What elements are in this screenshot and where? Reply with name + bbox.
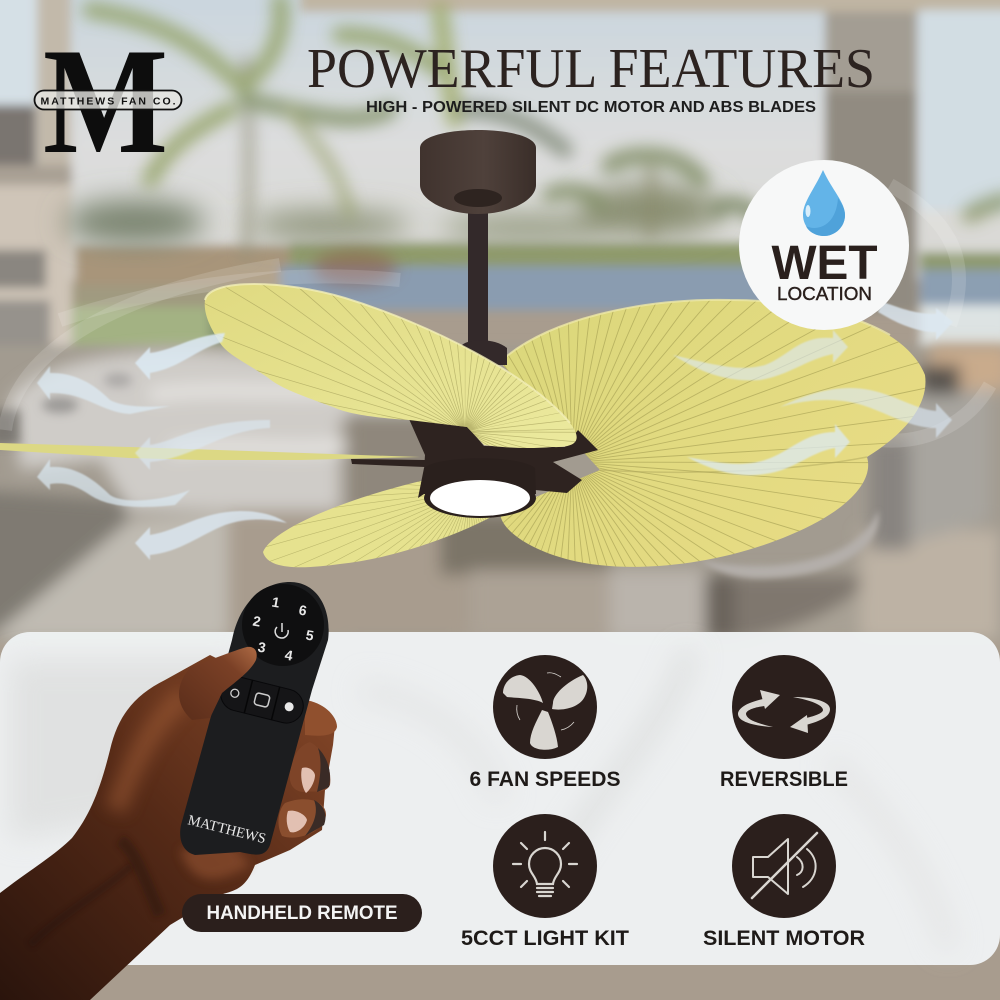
remote numbers: 2 [252,613,262,630]
remote numbers: 1 [271,594,281,611]
remote brand: MATTHEWS [186,812,268,847]
table top [700,510,879,578]
ceiling fan [0,130,940,652]
light globe [430,480,530,516]
finger: ring [278,799,326,838]
feature: 5cct light kit: 5CCT LIGHT KIT [461,927,629,950]
feature: 6 fan speeds [470,655,620,791]
downrod [468,195,488,345]
icon: rotation arrows [738,690,830,733]
icon: muted speaker [752,833,817,898]
finger: middle [290,742,330,792]
icon: water drop [803,170,845,236]
remote dial [242,584,324,666]
finger: index [305,700,337,736]
hand: arm and fingers behind remote [0,655,337,1000]
hand: thumb [179,647,257,720]
feature: silent motor: SILENT MOTOR [703,927,865,950]
motor housing and blade arms [351,419,598,518]
arrow: far right lower [780,388,952,438]
remote numbers: 4 [284,647,294,664]
arrow: right lower [687,424,850,475]
wind arrows [37,302,953,560]
subtitle: HIGH - POWERED SILENT DC MOTOR AND ABS BLADES [366,99,816,116]
logo: Matthews Fan Co.: MATTHEWS FAN CO. [40,96,176,108]
icon: power [275,623,288,638]
arrow: left upper [135,333,225,380]
remote numbers: 5 [305,627,315,644]
feature: reversible [720,655,848,791]
badge: wet location: WET [772,237,878,290]
fan blade: right pair [500,300,926,567]
icon: fan [503,673,587,750]
title: POWERFUL FEATURES [307,38,875,100]
label: handheld remote [182,894,422,932]
arrow: far right upper [878,302,953,340]
feature: reversible: REVERSIBLE [720,768,848,791]
badge: wet location: LOCATION [777,284,872,304]
arrow: left middle [135,420,270,470]
remote in hand [0,582,422,1000]
remote function buttons [217,673,307,727]
wind swirl bands [5,185,990,441]
label: handheld remote: HANDHELD REMOTE [206,903,398,924]
fan blade: lower left [263,480,490,568]
remote body [180,582,329,855]
canopy [420,130,536,214]
fan blade: top left [204,284,577,448]
panel: features background [0,632,1000,965]
remote numbers: 3 [257,639,267,656]
remote numbers: 6 [298,602,308,619]
arrow: far left lower [37,459,190,507]
fan blade: far left edge-on [0,443,420,460]
arrow: left lower [135,511,287,560]
logo: Matthews Fan Co.: M [43,17,168,185]
remote numbers [252,594,315,664]
arrow: right upper [673,330,848,380]
badge: wet location [739,160,909,330]
icon: light bulb [513,832,577,896]
feature: 5cct light kit [461,814,629,950]
arrow: far left upper [37,366,170,414]
feature: 6 fan speeds: 6 FAN SPEEDS [470,768,620,791]
feature: silent motor [703,814,865,950]
